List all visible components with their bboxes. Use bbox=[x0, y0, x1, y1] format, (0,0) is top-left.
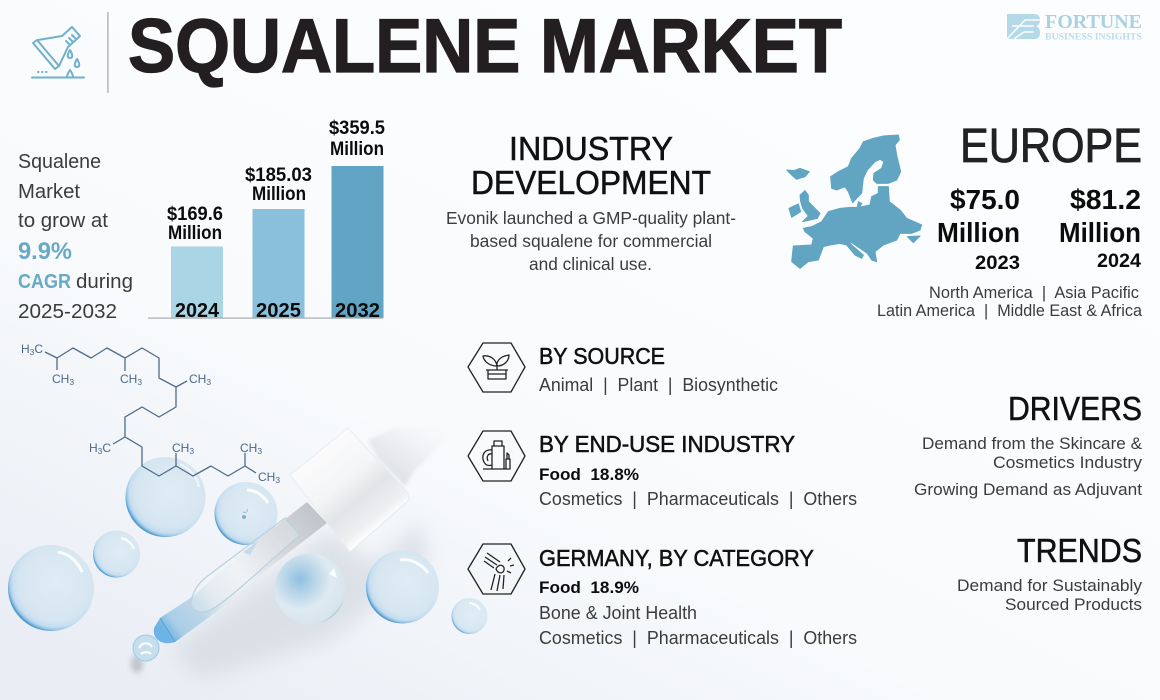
CAGR text block: Squalene bbox=[18, 150, 101, 173]
dropper cap bbox=[290, 428, 409, 552]
molecule: squalene structure: CH bbox=[120, 372, 137, 386]
bar: 2025: Million bbox=[252, 184, 306, 205]
section: trends: TRENDS bbox=[1017, 532, 1142, 569]
molecule: squalene structure: 3 bbox=[257, 446, 262, 456]
bar: 2024: $169.6 bbox=[167, 204, 223, 225]
CAGR text block: 9.9% bbox=[18, 238, 72, 265]
droplet: far right small bbox=[452, 598, 488, 634]
CAGR text block: 2025-2032 bbox=[18, 300, 117, 323]
bar: 2024: 2024 bbox=[175, 300, 220, 322]
molecule: squalene structure: CH bbox=[189, 372, 206, 386]
other regions list: North America | Asia Pacific bbox=[929, 284, 1139, 302]
icon: knee joint hexagon bbox=[468, 544, 525, 594]
molecule: squalene structure: 3 bbox=[30, 347, 35, 357]
molecule: squalene structure: CH bbox=[52, 372, 69, 386]
droplet: far left bbox=[8, 545, 94, 631]
section: trends bbox=[957, 532, 1143, 614]
Europe 2024 value bbox=[1059, 184, 1141, 272]
CAGR text block: Market bbox=[18, 180, 80, 203]
CAGR text block bbox=[18, 150, 133, 323]
icon: flask with drops bbox=[32, 27, 84, 78]
droplet: upper large bbox=[126, 457, 206, 537]
molecule: squalene structure: 3 bbox=[275, 475, 280, 485]
section: Germany by category: Food 18.9% bbox=[539, 578, 639, 597]
section: drivers: Demand from the Skincare & bbox=[922, 434, 1143, 453]
industry development block: INDUSTRY bbox=[509, 130, 673, 167]
other regions list: Latin America | Middle East & Africa bbox=[877, 302, 1143, 320]
bar: 2024 bbox=[167, 204, 223, 322]
bar: 2032: 2032 bbox=[335, 300, 380, 322]
molecule: squalene structure: 3 bbox=[206, 377, 211, 387]
header divider bbox=[107, 12, 109, 93]
bar: 2025: 2025 bbox=[256, 300, 301, 322]
bar: 2025: $185.03 bbox=[245, 165, 312, 186]
illustration: dropper and serum droplets bbox=[8, 425, 488, 680]
molecule: squalene structure: CH bbox=[240, 441, 257, 455]
industry development block: Evonik launched a GMP-quality plant- bbox=[446, 208, 736, 228]
bar: 2032: Million bbox=[330, 139, 384, 160]
Europe 2023 value: 2023 bbox=[975, 253, 1020, 274]
section: drivers bbox=[914, 390, 1143, 499]
section: by end-use industry: Cosmetics | Pharmaceuticals | Others bbox=[539, 489, 857, 509]
section: drivers: Cosmetics Industry bbox=[993, 453, 1143, 472]
icon: plant hexagon bbox=[468, 343, 525, 392]
molecule: squalene structure: 3 bbox=[189, 446, 194, 456]
section: Germany by category: Bone & Joint Health bbox=[539, 603, 697, 623]
Europe heading: EUROPE bbox=[960, 120, 1142, 173]
droplet: upper right bbox=[214, 482, 278, 545]
molecule: squalene structure: 3 bbox=[98, 446, 103, 456]
section: Germany by category: GERMANY, BY CATEGORY bbox=[539, 545, 814, 571]
dropper shadow bbox=[170, 520, 430, 680]
icon: cosmetics hexagon bbox=[468, 431, 525, 481]
molecule: squalene structure: H bbox=[89, 441, 98, 455]
dropper rubber tail bbox=[368, 425, 462, 486]
logo: Fortune Business Insights bbox=[1007, 11, 1142, 42]
droplet: center bbox=[274, 554, 346, 624]
bar: 2025 bbox=[245, 165, 312, 322]
section: Germany by category bbox=[539, 545, 857, 648]
bar: 2032: $359.5 bbox=[329, 118, 385, 139]
drop at dropper tip bbox=[131, 635, 159, 673]
molecule: squalene structure: C bbox=[102, 441, 111, 455]
section: trends: Sourced Products bbox=[1005, 595, 1142, 614]
section: Germany by category: Cosmetics | Pharmaceuticals | Others bbox=[539, 628, 857, 648]
molecule: squalene structure: C bbox=[34, 342, 43, 356]
section: by end-use industry bbox=[539, 431, 857, 509]
industry development block: DEVELOPMENT bbox=[471, 164, 711, 201]
CAGR text block: to grow at bbox=[18, 209, 108, 232]
industry development block: based squalene for commercial bbox=[470, 231, 712, 251]
other regions list bbox=[877, 284, 1143, 320]
droplet: small left bbox=[93, 530, 140, 578]
Europe 2023 value: Million bbox=[937, 217, 1020, 248]
droplet: right bbox=[366, 550, 439, 624]
bar: 2032 bbox=[329, 118, 385, 322]
Europe 2024 value: Million bbox=[1059, 217, 1141, 248]
logo: Fortune Business Insights: BUSINESS INSIGHTS bbox=[1045, 32, 1142, 42]
molecule: squalene structure: H bbox=[21, 342, 30, 356]
bar: 2024: Million bbox=[168, 223, 222, 244]
Europe 2024 value: $81.2 bbox=[1070, 184, 1141, 215]
CAGR text block: CAGR bbox=[18, 270, 71, 293]
molecule: squalene structure: CH bbox=[172, 441, 189, 455]
CAGR text block: during bbox=[76, 270, 133, 293]
industry development block bbox=[446, 130, 736, 274]
Europe 2023 value bbox=[937, 184, 1020, 274]
logo: Fortune Business Insights: FORTUNE bbox=[1045, 11, 1142, 33]
molecule: squalene structure: CH bbox=[258, 470, 275, 484]
dropper tube bbox=[154, 502, 327, 643]
map: Europe bbox=[787, 135, 922, 268]
section: trends: Demand for Sustainably bbox=[957, 576, 1143, 595]
title: SQUALENE MARKET bbox=[128, 4, 842, 89]
Europe 2023 value: $75.0 bbox=[950, 184, 1020, 215]
industry development block: and clinical use. bbox=[529, 254, 652, 274]
molecule: squalene structure bbox=[21, 342, 280, 485]
section: drivers: Growing Demand as Adjuvant bbox=[914, 480, 1142, 499]
molecule: squalene structure: 3 bbox=[137, 377, 142, 387]
molecule: squalene structure: 3 bbox=[69, 377, 74, 387]
section: by source: Animal | Plant | Biosynthetic bbox=[539, 375, 778, 395]
section: by end-use industry: BY END-USE INDUSTRY bbox=[539, 431, 795, 457]
bar chart bbox=[148, 118, 385, 322]
Europe 2024 value: 2024 bbox=[1097, 251, 1141, 272]
section: by end-use industry: Food 18.8% bbox=[539, 465, 639, 484]
section: drivers: DRIVERS bbox=[1008, 390, 1142, 427]
section: by source: BY SOURCE bbox=[539, 343, 665, 369]
section: by source bbox=[539, 343, 778, 395]
